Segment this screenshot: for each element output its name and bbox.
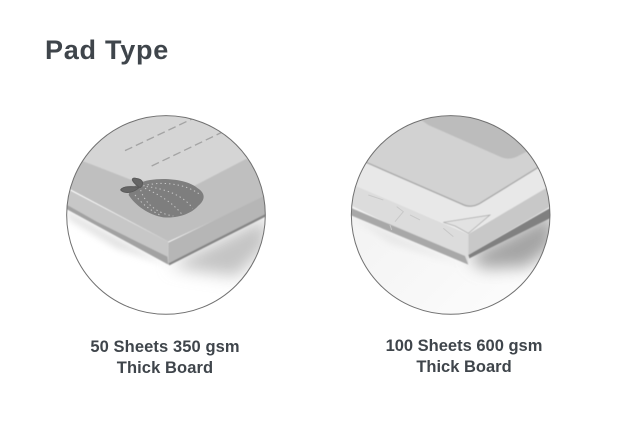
caption: 100 sheets: 100 Sheets 600 gsm: [386, 337, 542, 355]
icon: pumpkin: [121, 178, 204, 218]
shadow under pad: [170, 217, 267, 277]
title: Pad Type: [45, 35, 169, 65]
torn edge marks: [368, 195, 453, 237]
circle outline: [67, 116, 265, 314]
right face: [468, 188, 549, 254]
left edge strip: [68, 190, 169, 262]
cover surface: [356, 164, 546, 230]
panel: 50 sheets photo: [66, 115, 266, 315]
darker tab: [422, 116, 526, 159]
panel: 100 sheets photo: [350, 115, 550, 315]
circle outline: [351, 116, 550, 314]
stitch lines: [125, 118, 223, 166]
caption: 100 sheets: Thick Board: [416, 358, 512, 376]
peeled corner: [443, 215, 490, 233]
top surface: [83, 116, 248, 186]
caption: 50 sheets: Thick Board: [117, 359, 213, 377]
right face: [168, 197, 265, 264]
shadow under pad: [468, 212, 553, 268]
inset panel: [366, 120, 538, 208]
left edge torn: [352, 186, 468, 262]
cover band: [70, 159, 263, 242]
caption: 50 sheets: 50 Sheets 350 gsm: [90, 338, 240, 356]
